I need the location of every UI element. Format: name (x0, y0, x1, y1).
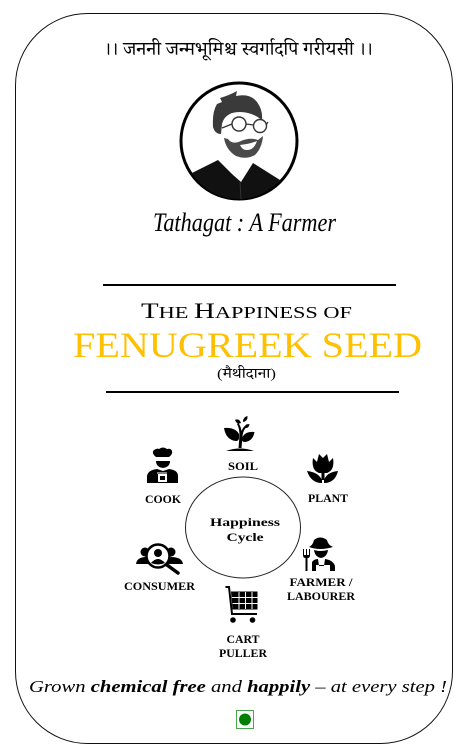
sanskrit verse heading: ।। जननी जन्मभूमिश्च स्वर्गादपि गरीयसी ।। (104, 38, 373, 61)
portrait icon: farmer in a circle (181, 83, 297, 199)
center label: Happiness (210, 515, 280, 529)
icon: cart (226, 587, 258, 623)
center ellipse (186, 477, 300, 578)
icon: soil sprout (224, 416, 254, 451)
label: plant: PLANT (308, 493, 348, 505)
icon: vegetarian mark (236, 710, 254, 728)
icon: farmer (303, 538, 335, 571)
label: soil: SOIL (228, 461, 258, 473)
icon: cook (147, 448, 178, 483)
label: cart puller: CART (226, 634, 260, 646)
label: farmer / labourer (287, 577, 356, 603)
author name: Tathagat : A Farmer (153, 208, 337, 237)
center label (210, 515, 280, 544)
main title: fenugreek seed: FENUGREEK SEED (73, 325, 422, 365)
label: cook: COOK (145, 494, 181, 506)
label: consumer: CONSUMER (124, 581, 196, 593)
label: cart puller (219, 634, 268, 660)
tagline: Grown chemical free and happily – at every step ! (29, 677, 447, 696)
label: cart puller: PULLER (219, 648, 268, 660)
hindi subtitle: (मैथीदाना) (217, 364, 276, 382)
center label: Cycle (226, 530, 264, 544)
label: farmer / labourer: FARMER / (290, 577, 353, 589)
icon: plant tulip (307, 454, 338, 483)
label: farmer / labourer: LABOURER (287, 591, 356, 603)
top rule (103, 284, 396, 286)
happiness cycle diagram (124, 416, 356, 660)
title line: THE H APPINESS OF (141, 298, 352, 323)
icon: consumer (136, 544, 183, 573)
bottom rule (106, 391, 399, 393)
